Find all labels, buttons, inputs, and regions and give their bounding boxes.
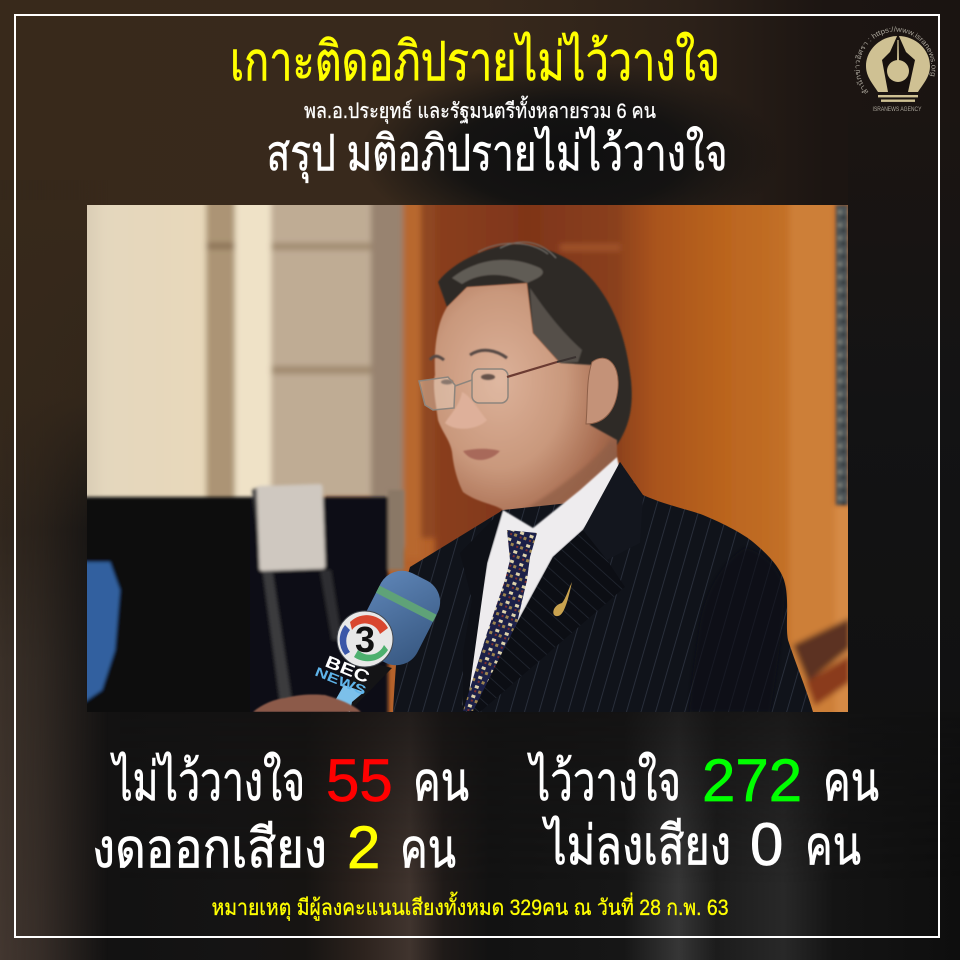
title: เกาะติดอภิปรายไม่ไว้วางใจ	[230, 31, 720, 92]
vote: confidence 272: คน	[823, 752, 879, 812]
man: face	[434, 283, 617, 527]
man: sleeve shading	[690, 548, 785, 712]
man: shirt	[463, 457, 622, 705]
microphone: handle	[386, 666, 392, 674]
subtitle: พล.อ.ประยุทธ์ และรัฐมนตรีทั้งหลายรวม 6 คน	[304, 96, 656, 124]
vote: not voting 0: 0	[750, 811, 783, 878]
vote: abstain 2: คน	[400, 819, 456, 879]
logo: Isranews Agency	[854, 26, 936, 113]
man: hair	[438, 242, 632, 445]
vote: confidence 272	[527, 747, 879, 814]
vote: abstain 2: 2	[347, 814, 380, 881]
logo arc text: สำนักข่าวอิศรา : https://www.isranews.org	[854, 26, 936, 94]
man: patterned tie	[463, 530, 537, 711]
summary heading: สรุป มติอภิปรายไม่ไว้วางใจ	[266, 125, 728, 183]
vote: confidence 272: ไว้วางใจ	[527, 751, 681, 812]
man: suit jacket	[393, 462, 813, 712]
microphone: BEC News tag: BEC	[323, 652, 372, 687]
microphone: channel 3 badge: 3	[355, 619, 375, 660]
vote: confidence 272: 272	[702, 747, 802, 814]
vote: no confidence 55: ไม่ไว้วางใจ	[110, 751, 305, 812]
photo background: dark furniture	[80, 484, 404, 719]
man: jacket collar and lapels	[583, 462, 643, 560]
microphone: BEC News tag: NEWS	[313, 664, 369, 698]
logo caption: ISRANEWS AGENCY	[872, 107, 922, 113]
microphone: foam	[366, 570, 440, 666]
vote: not voting 0: ไม่ลงเสียง	[542, 815, 731, 876]
vote: no confidence 55: 55	[326, 747, 393, 814]
man: ear	[586, 358, 618, 424]
microphone: channel 3 badge	[337, 611, 393, 667]
man: brows, eyes, nose and mouth	[430, 350, 507, 460]
man: neck shadow	[526, 446, 610, 508]
vote: not voting 0	[542, 811, 861, 878]
footnote: หมายเหตุ มีผู้ลงคะแนนเสียงทั้งหมด 329คน ณ วันที่ 28 ก.พ. 63	[212, 892, 728, 921]
photo: minister speaking to reporters	[80, 198, 855, 720]
reporter hand	[253, 694, 361, 712]
vote: abstain 2	[92, 814, 456, 881]
photo background: office walls and wood panels	[80, 198, 855, 720]
vote: no confidence 55: คน	[413, 752, 469, 812]
vote: no confidence 55	[110, 747, 469, 814]
vote: not voting 0: คน	[805, 816, 861, 876]
man: gold lapel pin	[553, 582, 572, 616]
microphone: BEC News tag	[315, 656, 370, 712]
man: glasses	[419, 357, 576, 410]
vote: abstain 2: งดออกเสียง	[92, 819, 327, 879]
